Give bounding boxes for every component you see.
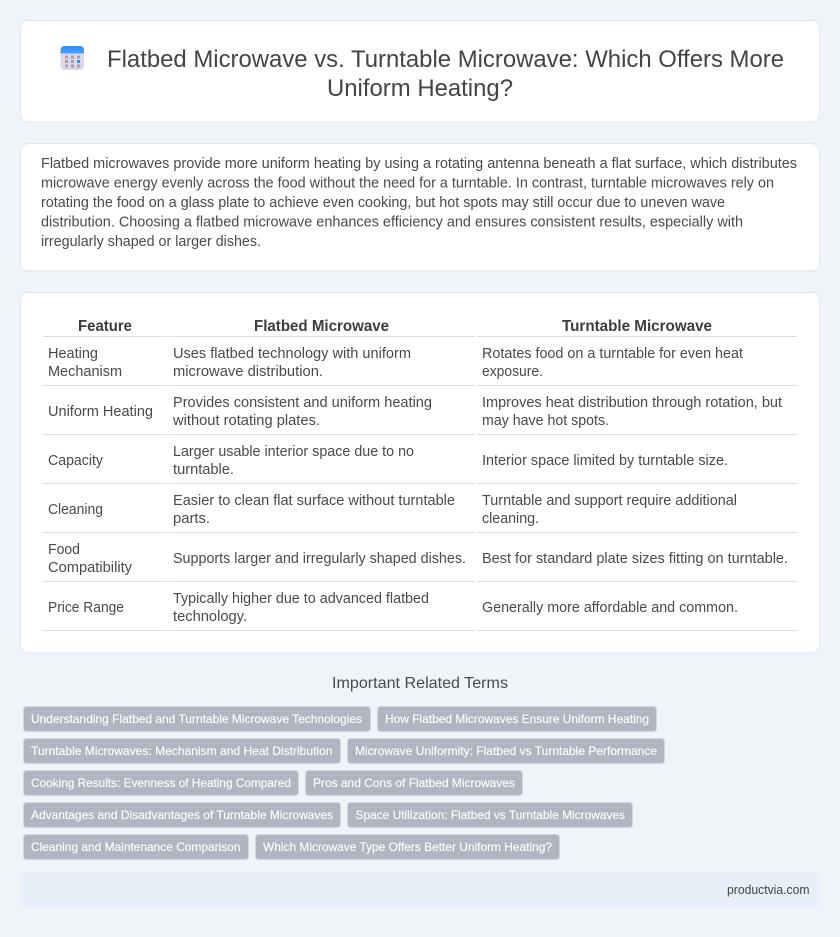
row: food compatibility: Supports larger and irregularly shaped dishes. — [173, 551, 466, 567]
row: heating mechanism: Mechanism — [48, 364, 122, 380]
tag: Understanding Flatbed and Turntable Microwave Technologies — [31, 712, 362, 726]
row: uniform heating: Improves heat distribution through rotation, but — [482, 395, 782, 411]
table header — [43, 318, 797, 337]
panel: comparison table — [20, 292, 820, 653]
title: Flatbed Microwave vs. Turntable Microwave: Which Offers More — [107, 46, 784, 73]
tag: Turntable Microwaves: Mechanism and Heat Distribution — [31, 744, 332, 758]
row: heating mechanism: exposure. — [482, 364, 543, 380]
tag: Microwave Uniformity: Flatbed vs Turntable Performance — [355, 744, 657, 758]
title — [107, 46, 784, 102]
tag — [348, 738, 664, 764]
row: heating mechanism: Rotates food on a turntable for even heat — [482, 346, 743, 362]
footer bar: productvia.com — [727, 883, 810, 897]
icon: calendar — [60, 46, 84, 70]
heading: related terms: Important Related Terms — [332, 675, 508, 692]
row: capacity: turntable. — [173, 462, 234, 478]
row: price range: technology. — [173, 609, 247, 625]
tag — [306, 770, 522, 796]
tag — [256, 834, 560, 860]
row: uniform heating: Uniform Heating — [48, 404, 153, 420]
row: heating mechanism: Uses flatbed technology with uniform — [173, 346, 411, 362]
tag: How Flatbed Microwaves Ensure Uniform Heating — [385, 712, 649, 726]
panel: summary paragraph: microwave energy evenly across the food without the need for a turntable. In contrast, turntable microwaves rely on — [41, 176, 774, 192]
panel: summary paragraph: irregularly shaped or larger dishes. — [41, 234, 261, 250]
tag — [24, 706, 370, 732]
row: heating mechanism: microwave distribution. — [173, 364, 323, 380]
row: cleaning: Turntable and support require additional — [482, 493, 737, 509]
tag — [378, 706, 656, 732]
panel: summary paragraph: distribution. Choosing a flatbed microwave enhances efficiency and ensures consistent results, especially with — [41, 214, 743, 230]
row: cleaning: Cleaning — [48, 502, 103, 518]
row: price range: Generally more affordable and common. — [482, 600, 738, 616]
row: price range: Price Range — [48, 600, 124, 616]
tag — [348, 802, 632, 828]
row: capacity: Interior space limited by turntable size. — [482, 453, 728, 469]
row: uniform heating: Provides consistent and uniform heating — [173, 395, 432, 411]
row: cleaning — [43, 493, 797, 533]
row: food compatibility: Best for standard plate sizes fitting on turntable. — [482, 551, 788, 567]
panel: title card — [20, 20, 820, 122]
row: uniform heating — [43, 395, 797, 435]
row: uniform heating: without rotating plates. — [172, 413, 320, 429]
row: capacity: Capacity — [48, 453, 104, 469]
row: price range — [43, 591, 797, 631]
panel: summary paragraph: Flatbed microwaves provide more uniform heating by using a rotating antenna beneath a flat surface, which distributes — [41, 156, 797, 172]
row: capacity: Larger usable interior space due to no — [173, 444, 414, 460]
row: heating mechanism: Heating — [48, 346, 98, 362]
panel: summary paragraph — [20, 144, 820, 271]
footer bar — [20, 873, 820, 907]
tag — [24, 834, 248, 860]
row: food compatibility: Food — [48, 542, 80, 558]
tag: Cooking Results: Evenness of Heating Compared — [31, 776, 291, 790]
row: cleaning: cleaning. — [482, 511, 539, 527]
row: food compatibility — [43, 542, 797, 582]
tag: Pros and Cons of Flatbed Microwaves — [313, 776, 515, 790]
row: cleaning: Easier to clean flat surface without turntable — [173, 493, 455, 509]
tag — [24, 770, 298, 796]
title: Uniform Heating? — [327, 75, 513, 102]
row: capacity — [43, 444, 797, 484]
tag: Space Utilization: Flatbed vs Turntable Microwaves — [356, 808, 625, 822]
row: cleaning: parts. — [173, 511, 210, 527]
row: heating mechanism — [43, 346, 797, 386]
row: food compatibility: Compatibility — [48, 560, 133, 576]
tag: Advantages and Disadvantages of Turntable Microwaves — [31, 808, 333, 822]
panel: summary paragraph: rotating the food on a glass plate to achieve even cooking, but hot spots may still occur due to uneven wave — [41, 195, 725, 211]
tag — [24, 738, 340, 764]
table header: Turntable Microwave — [562, 318, 712, 335]
tag: Which Microwave Type Offers Better Uniform Heating? — [263, 840, 552, 854]
table header: Feature — [78, 318, 132, 335]
row: price range: Typically higher due to advanced flatbed — [173, 591, 429, 607]
table header: Flatbed Microwave — [254, 318, 389, 335]
row: uniform heating: may have hot spots. — [482, 413, 609, 429]
panel: related term tags — [24, 706, 664, 860]
tag: Cleaning and Maintenance Comparison — [31, 840, 240, 854]
tag — [24, 802, 340, 828]
